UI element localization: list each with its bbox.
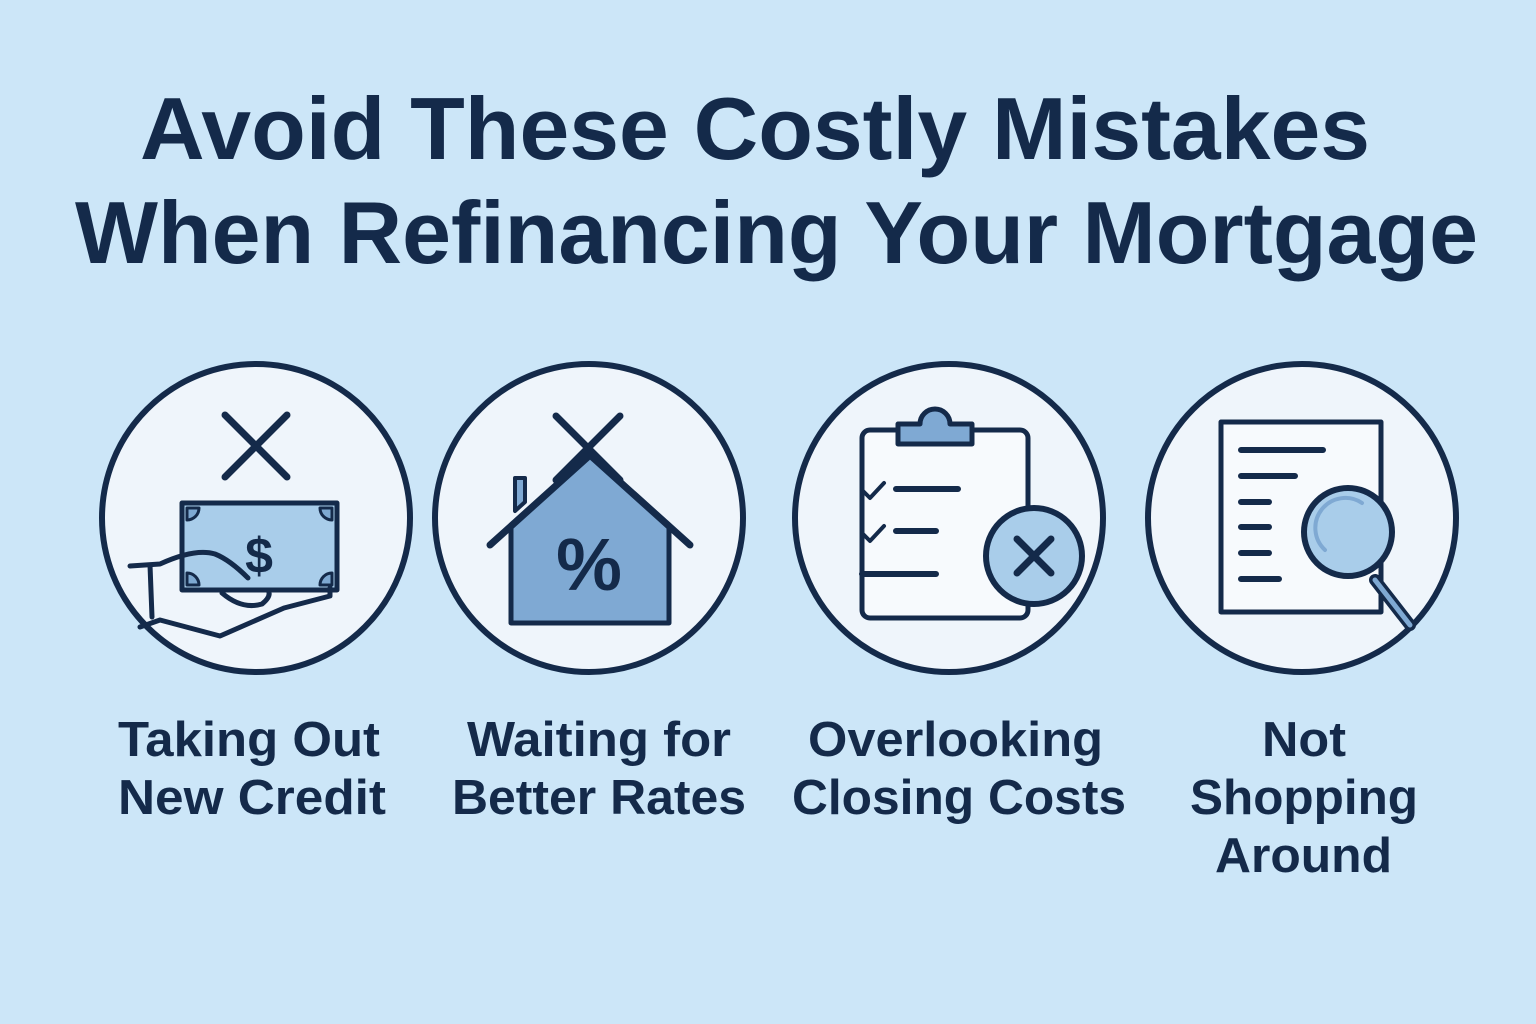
icon: house with percent: % [556, 523, 622, 606]
label: Waiting for [467, 713, 731, 767]
icon: clipboard with x [795, 364, 1103, 672]
label [1190, 713, 1418, 883]
label [792, 713, 1126, 825]
title [75, 79, 1478, 282]
title: Avoid These Costly Mistakes [140, 79, 1370, 178]
label: Shopping [1190, 771, 1418, 825]
label: New Credit [118, 771, 386, 825]
label: Overlooking [808, 713, 1103, 767]
icon: house with percent [435, 364, 743, 672]
title: When Refinancing Your Mortgage [75, 183, 1478, 282]
label: Better Rates [452, 771, 746, 825]
label: Taking Out [118, 713, 380, 767]
panel: not shopping around [1148, 364, 1456, 883]
label: Not [1262, 713, 1346, 767]
icon: hand with money: $ [245, 528, 273, 584]
label: Closing Costs [792, 771, 1126, 825]
label: Around [1215, 829, 1392, 883]
panel: waiting for better rates [435, 364, 746, 825]
icon: document with magnifier [1148, 364, 1456, 672]
icon: hand with money [102, 364, 410, 672]
panel: overlooking closing costs [792, 364, 1126, 825]
panel: taking out new credit [102, 364, 410, 825]
label [118, 713, 386, 825]
label [452, 713, 746, 825]
